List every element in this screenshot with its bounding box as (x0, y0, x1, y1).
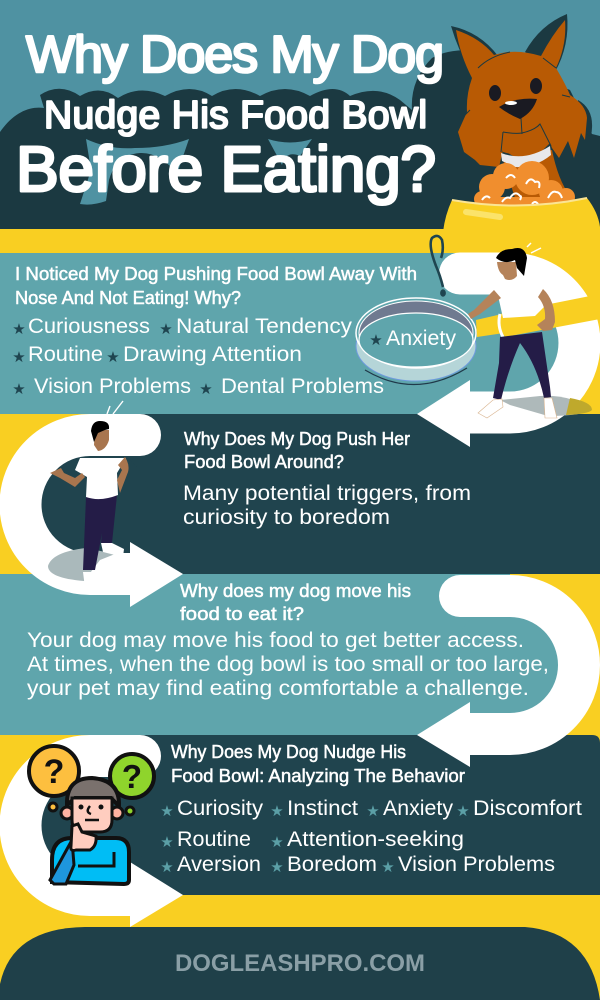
list: first question reasons: ★ (199, 380, 213, 398)
list: fourth question behaviours: ★ (366, 802, 380, 820)
list: first question reasons: ★ (159, 320, 173, 338)
list: first question reasons: ★ (12, 320, 26, 338)
list: fourth question behaviours: Curiosity (177, 797, 264, 820)
list: first question reasons (12, 315, 456, 398)
arrow: third curved white arrow (417, 596, 579, 767)
text block: third answer (27, 629, 549, 700)
title: Before Eating? (16, 133, 436, 205)
list: fourth question behaviours: ★ (160, 833, 174, 851)
text block: second answer: curiosity to boredom (183, 506, 390, 529)
list: first question reasons: ★ (106, 348, 120, 366)
title: Why Does My Dog (26, 26, 444, 84)
list: first question reasons: ★ (12, 380, 26, 398)
text block: second answer (183, 482, 471, 529)
illustration: woman holding magnifying glass (468, 243, 592, 418)
panel: first question background (0, 253, 570, 414)
heading: first question: Nose And Not Eating! Why? (15, 288, 241, 308)
panel: yellow band and right side (0, 229, 600, 1000)
list: first question reasons: Natural Tendency (176, 315, 353, 338)
title: Nudge His Food Bowl (44, 94, 427, 137)
illustration: man standing (48, 401, 129, 590)
list: fourth question behaviours: ★ (456, 802, 470, 820)
panel: fourth question background (30, 735, 600, 895)
heading: third question (180, 581, 411, 624)
text block: second answer: Many potential triggers, from (183, 482, 471, 505)
list: first question reasons: Drawing Attention (123, 343, 302, 366)
footer website text: DOGLEASHPRO.COM (175, 950, 425, 977)
heading: fourth question: Food Bowl: Analyzing The Behavior (171, 766, 465, 786)
list: fourth question behaviours: ★ (381, 858, 395, 876)
heading: second question (184, 429, 410, 472)
icon: thinking person with question marks: ? (44, 753, 64, 791)
list: fourth question behaviours: ★ (270, 858, 284, 876)
heading: third question: food to eat it? (180, 604, 304, 624)
list: fourth question behaviours: Routine (177, 828, 251, 851)
list: fourth question behaviours: ★ (160, 802, 174, 820)
list: first question reasons: Curiousness (28, 315, 150, 338)
icon: magnifying glass (356, 296, 600, 385)
heading: second question: Why Does My Dog Push Her (184, 429, 410, 449)
list: fourth question behaviours: ★ (160, 858, 174, 876)
heading: third question: Why does my dog move his (180, 581, 411, 601)
heading: first question (15, 264, 417, 308)
heading: fourth question (171, 742, 465, 786)
list: fourth question behaviours: Attention-seeking (287, 828, 464, 851)
heading: fourth question: Why Does My Dog Nudge His (171, 742, 406, 762)
icon: exclamation mark (431, 236, 445, 295)
text block: third answer: your pet may find eating comfortable a challenge. (27, 677, 529, 700)
panel: second question background (30, 414, 600, 574)
text block: third answer: Your dog may move his food to get better access. (27, 629, 524, 652)
panel: header background (0, 0, 600, 230)
panel: third question background (0, 574, 570, 735)
list: fourth question behaviours: Anxiety (383, 797, 453, 820)
list: fourth question behaviours: Boredom (287, 853, 377, 876)
list: fourth question behaviours: Aversion (177, 853, 261, 876)
list: fourth question behaviours: Instinct (287, 797, 358, 820)
heading: first question: I Noticed My Dog Pushing Food Bowl Away With (15, 264, 417, 284)
list: fourth question behaviours: Vision Problems (398, 853, 555, 876)
icon: dog eating from yellow bowl (443, 14, 600, 232)
icon: thinking person with question marks: ? (122, 758, 142, 795)
text block: third answer: At times, when the dog bowl is too small or too large, (27, 653, 549, 676)
panel: footer (0, 927, 600, 1000)
list: first question reasons: Routine (28, 343, 103, 366)
arrow: first curved white arrow (417, 274, 579, 447)
list: fourth question behaviours (160, 797, 582, 876)
heading: second question: Food Bowl Around? (184, 452, 344, 472)
arrow: second curved white arrow (21, 435, 183, 607)
arrow: fourth curved white arrow (21, 756, 183, 927)
list: fourth question behaviours: ★ (270, 802, 284, 820)
list: first question reasons: ★ (369, 331, 383, 349)
list: first question reasons: Vision Problems (34, 375, 191, 398)
list: first question reasons: ★ (12, 348, 26, 366)
title (16, 26, 444, 205)
list: fourth question behaviours: ★ (270, 833, 284, 851)
list: first question reasons: Anxiety (386, 327, 456, 350)
icon: thinking person with question marks (29, 746, 154, 884)
list: first question reasons: Dental Problems (221, 375, 384, 398)
list: fourth question behaviours: Discomfort (473, 797, 582, 820)
